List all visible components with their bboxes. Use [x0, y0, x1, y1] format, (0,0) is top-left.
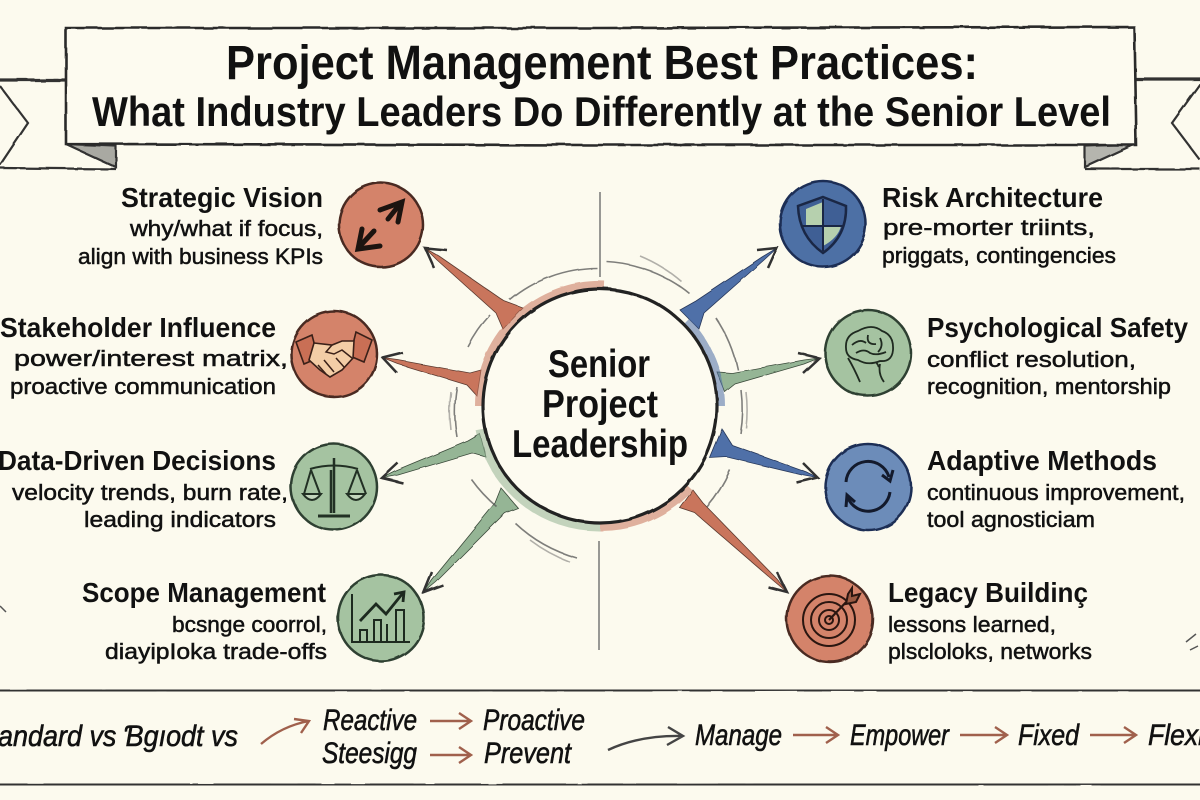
arrow: reactive to proactive [430, 713, 471, 729]
item: data-driven decisions [0, 444, 377, 532]
connector: risk architecture [680, 248, 777, 329]
central divider bottom [598, 541, 600, 650]
text: scope management [82, 577, 327, 664]
item: stakeholder influence [0, 311, 377, 399]
hub label: Leadership [512, 423, 688, 466]
text: legacy building: Legacy Buildinç [888, 577, 1088, 608]
text: data-driven decisions: Data-Driven Decisions [0, 445, 276, 476]
hub label: Project [542, 383, 658, 426]
hub sketch arcs [450, 256, 747, 562]
text: strategic vision: Strategic Vision [121, 182, 323, 213]
icon: handshake [291, 311, 377, 397]
text: scope management: bcsnge coorrol, [172, 612, 327, 637]
title banner [0, 27, 1200, 169]
hub connectors [382, 248, 819, 592]
connector: legacy building [680, 490, 787, 592]
connector: stakeholder influence [383, 353, 481, 396]
text: psychological safety [927, 312, 1188, 399]
text: stakeholder influence: Stakeholder Influence [0, 312, 276, 343]
text: reactive pairs [322, 704, 585, 770]
item: risk architecture [780, 181, 1116, 268]
text: reactive pairs: Proactive [483, 704, 585, 737]
hub label: Senior [548, 343, 650, 386]
icon: target [787, 576, 873, 662]
text: psychological safety: recognition, mentorship [927, 374, 1171, 399]
right ribbon tail [1085, 79, 1200, 169]
text: stakeholder influence [0, 312, 288, 399]
text: fixed: Fixed [1018, 719, 1080, 752]
text: psychological safety: conflict resolution, [927, 347, 1136, 372]
title line 2: What Industry Leaders Do Differently at the Senior Level [92, 88, 1111, 135]
text: empower: Empower [850, 719, 950, 752]
icon: scales [291, 444, 377, 530]
arrow: steering to prevent [430, 747, 471, 763]
text: legacy building: lessons learned, [888, 612, 1056, 637]
arrow: curved dark [608, 727, 683, 750]
item: scope management [82, 575, 424, 664]
text: reactive pairs: Prevent [484, 737, 572, 770]
text: standard vs: andard vs Ɓgıodt vs [0, 720, 238, 753]
text: risk architecture [882, 182, 1116, 268]
arrow: empower to fixed [960, 727, 1007, 743]
connector: data-driven decisions [382, 434, 486, 483]
text: data-driven decisions: velocity trends, burn rate, [12, 480, 288, 505]
text: data-driven decisions [0, 445, 288, 532]
arrow: fixed to flexible [1090, 727, 1136, 743]
edge sketch marks [0, 606, 1198, 650]
connector: psychological safety [717, 353, 819, 392]
text: stakeholder influence: power/interest matrix, [14, 346, 288, 371]
text: strategic vision: why/what if focus, [129, 216, 323, 241]
connector: strategic vision [425, 248, 523, 329]
text: adaptive methods: Adaptive Methods [927, 445, 1157, 476]
text: legacy building [888, 577, 1092, 664]
hub label [512, 343, 688, 466]
text: risk architecture: pre-morter triints, [883, 215, 1095, 240]
arrow: curved red [261, 719, 309, 744]
title line 1: Project Management Best Practices: [226, 37, 978, 90]
icon: refresh cycle [825, 444, 911, 530]
text: risk architecture: priggats, contingencies [882, 243, 1116, 268]
item: adaptive methods [825, 444, 1185, 532]
text: data-driven decisions: leading indicators [84, 507, 276, 532]
text: adaptive methods: tool agnosticiam [927, 507, 1095, 532]
strip bottom rule [0, 784, 1200, 785]
text: reactive pairs: Reactive [323, 704, 417, 737]
icon: rising chart [338, 575, 424, 661]
bottom comparison strip [0, 690, 1200, 785]
icon: diverging arrows [339, 183, 423, 267]
item: legacy building [787, 576, 1092, 664]
connector: adaptive methods [710, 429, 818, 483]
item: strategic vision [78, 182, 423, 269]
left ribbon tail [0, 80, 116, 169]
icon: shield [780, 181, 866, 267]
text: adaptive methods [927, 445, 1185, 532]
arrow: manage to empower [793, 727, 838, 743]
text: reactive pairs: Steesigg [322, 737, 417, 770]
text: scope management: Scope Management [82, 577, 326, 608]
banner body [66, 27, 1136, 145]
text: strategic vision [78, 182, 323, 269]
text: manage: Manage [695, 719, 782, 752]
coloured hub washes [479, 285, 721, 527]
text: adaptive methods: continuous improvement, [927, 480, 1185, 505]
strip top rule [0, 690, 1200, 691]
icon: brain [825, 310, 911, 396]
connector: scope management [424, 488, 518, 592]
central divider top [599, 192, 601, 277]
text: risk architecture: Risk Architecture [882, 182, 1103, 213]
item: psychological safety [825, 310, 1188, 399]
text: strategic vision: align with business KPIs [78, 244, 323, 269]
hub circle [479, 285, 721, 527]
text: psychological safety: Psychological Safety [927, 312, 1188, 343]
text: stakeholder influence: proactive communication [10, 374, 276, 399]
text: scope management: diayipIoka trade-offs [105, 639, 327, 664]
text: legacy building: plscloloks, networks [888, 639, 1092, 664]
